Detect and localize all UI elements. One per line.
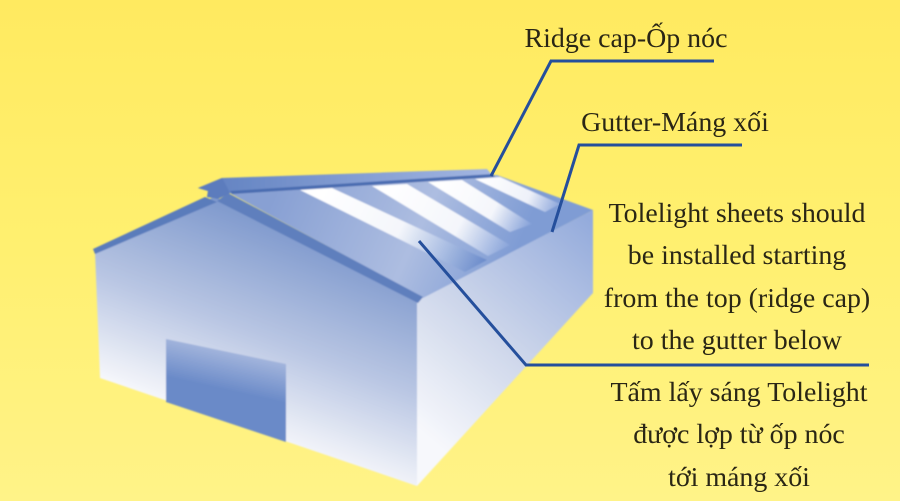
note: English instruction: Tolelight sheets should xyxy=(609,198,865,229)
note: Vietnamese instruction: được lợp từ ốp nóc xyxy=(633,419,845,450)
label: gutter: Gutter-Máng xối xyxy=(581,107,769,138)
note: English instruction: be installed starting xyxy=(628,240,846,271)
label: ridge cap: Ridge cap-Ốp nóc xyxy=(525,22,727,54)
note: Vietnamese instruction: tới máng xối xyxy=(668,462,810,493)
skylight sheet 3 xyxy=(428,180,532,232)
ridge cap xyxy=(198,169,493,198)
ridge cap end face xyxy=(198,178,230,199)
roof plane xyxy=(226,175,593,298)
note: English instruction xyxy=(604,198,870,356)
leader: Tolelight sheets xyxy=(419,241,869,365)
eave trim left xyxy=(93,197,217,254)
note: English instruction: to the gutter below xyxy=(632,325,843,356)
ridge cap shadow xyxy=(230,174,495,194)
eave trim right xyxy=(217,193,423,303)
leader: gutter xyxy=(552,145,742,232)
front gable wall xyxy=(95,198,420,486)
leader: ridge cap xyxy=(491,61,714,176)
skylight sheet 4 xyxy=(475,177,560,212)
note: Vietnamese instruction xyxy=(610,377,868,493)
side wall xyxy=(417,210,593,486)
skylight sheet 2 xyxy=(372,184,510,256)
note: Vietnamese instruction: Tấm lấy sáng Tolelight xyxy=(610,377,868,408)
roller door xyxy=(166,339,286,442)
note: English instruction: from the top (ridge cap) xyxy=(604,283,870,314)
skylight sheet 1 xyxy=(300,188,487,272)
warehouse building illustration xyxy=(93,169,593,486)
